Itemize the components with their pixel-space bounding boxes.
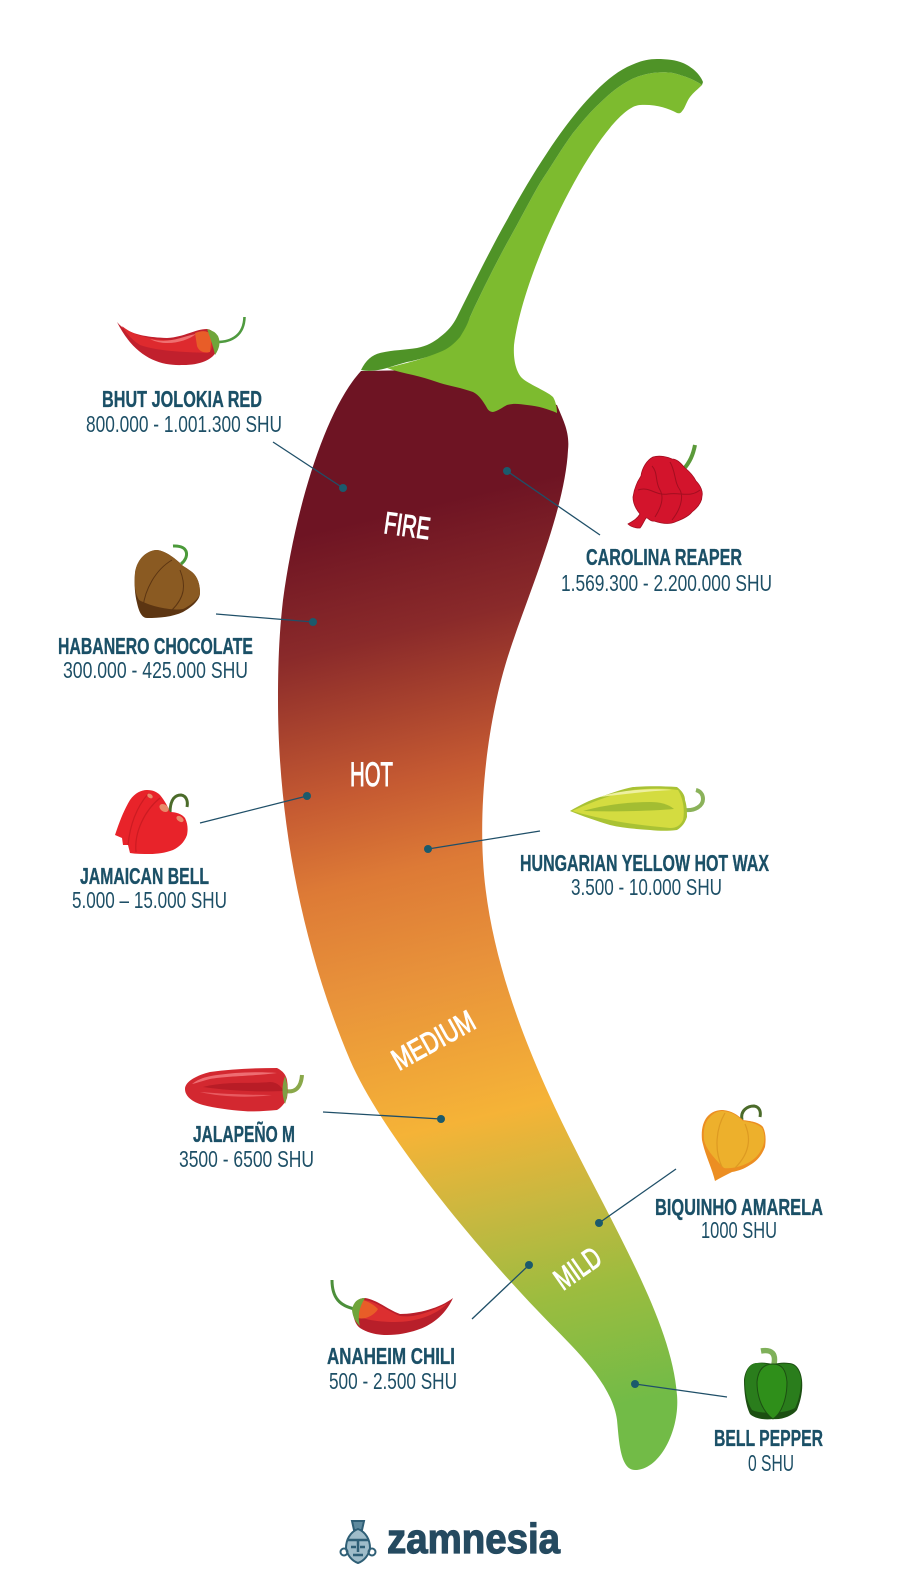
wordmark: zamnesia — [387, 1515, 561, 1562]
pepper: Jamaican Bell — [72, 790, 311, 913]
scoville range: 5.000 – 15.000 SHU — [72, 887, 227, 913]
pointer — [424, 831, 540, 853]
chili body — [278, 370, 677, 1470]
pepper name: BHUT JOLOKIA RED — [102, 386, 262, 412]
scoville range: 1000 SHU — [701, 1217, 777, 1243]
scoville range: 3.500 - 10.000 SHU — [571, 874, 722, 900]
zone label: MILD: MILD — [548, 1241, 608, 1297]
icon: chocolate habanero — [135, 546, 200, 618]
pepper name: ANAHEIM CHILI — [327, 1343, 455, 1369]
pointer — [216, 614, 317, 626]
icon: carolina reaper — [628, 445, 702, 528]
pepper: Hungarian Yellow Hot Wax — [424, 786, 769, 900]
chili stem dark edge — [361, 59, 703, 371]
chili stem light — [387, 72, 702, 413]
scoville range: 300.000 - 425.000 SHU — [63, 657, 248, 683]
icon: biquinho — [702, 1106, 766, 1181]
scoville range: 500 - 2.500 SHU — [329, 1368, 457, 1394]
pepper: Anaheim Chili — [327, 1261, 533, 1394]
pointer — [595, 1169, 676, 1227]
pepper name: BIQUINHO AMARELA — [655, 1194, 823, 1220]
icon: tribal mask — [340, 1521, 376, 1563]
pointer — [472, 1261, 533, 1319]
zone label: MEDIUM: MEDIUM — [386, 1005, 481, 1077]
scoville range: 0 SHU — [748, 1450, 794, 1476]
pepper: Jalapeño M — [179, 1068, 445, 1172]
icon: anaheim chili — [332, 1280, 453, 1335]
zone label: HOT: HOT — [350, 756, 393, 794]
pepper: Carolina Reaper — [503, 445, 772, 596]
zone label: FIRE: FIRE — [382, 505, 432, 546]
pepper: Habanero Chocolate — [58, 546, 317, 683]
icon: bell pepper — [744, 1351, 802, 1419]
pointer — [273, 442, 347, 492]
giant chili with heat gradient — [278, 59, 703, 1470]
pointer — [200, 792, 311, 823]
pointer — [631, 1380, 727, 1397]
logo: Zamnesia — [340, 1515, 561, 1563]
scoville range: 1.569.300 - 2.200.000 SHU — [561, 570, 772, 596]
pepper name: HUNGARIAN YELLOW HOT WAX — [520, 850, 769, 876]
icon: jalapeño — [185, 1068, 302, 1111]
icon: jamaican bell — [115, 790, 188, 854]
pepper name: BELL PEPPER — [714, 1425, 823, 1451]
pepper name: JALAPEÑO M — [193, 1120, 295, 1147]
pepper: Biquinho Amarela — [595, 1106, 823, 1243]
scoville range: 3500 - 6500 SHU — [179, 1146, 314, 1172]
pointer — [503, 467, 600, 535]
scoville range: 800.000 - 1.001.300 SHU — [86, 411, 282, 437]
pepper name: HABANERO CHOCOLATE — [58, 633, 253, 659]
icon: bhut jolokia chili — [117, 317, 244, 365]
pepper: Bell Pepper — [631, 1351, 823, 1476]
pepper name: JAMAICAN BELL — [80, 863, 209, 889]
pointer — [323, 1112, 445, 1123]
pepper name: CAROLINA REAPER — [586, 544, 742, 570]
icon: hungarian wax pepper — [570, 786, 703, 831]
pepper: Bhut Jolokia Red — [86, 317, 347, 492]
